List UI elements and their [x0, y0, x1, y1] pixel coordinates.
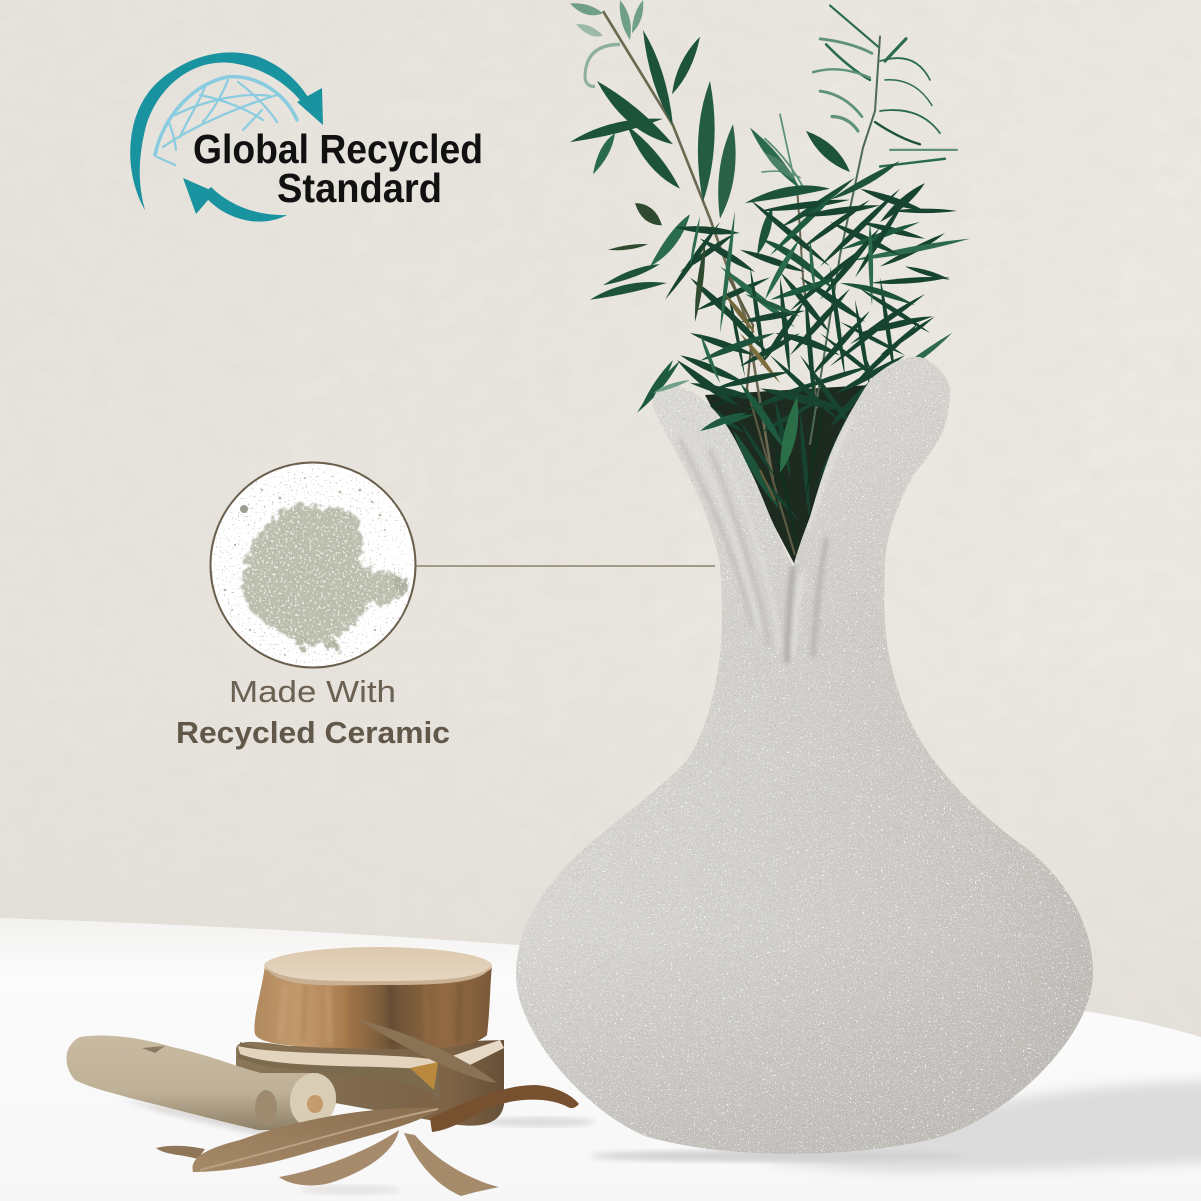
- connector line: [416, 565, 715, 567]
- big leaf: [193, 1108, 440, 1172]
- upper leaf: [358, 1020, 497, 1083]
- logo text: [193, 126, 483, 211]
- right stalk: [762, 6, 957, 444]
- left stalk: [570, 0, 795, 555]
- dried leaves and twig: [156, 1020, 579, 1196]
- dark vase interior: [705, 385, 870, 567]
- table shadows: [120, 1080, 1201, 1195]
- lower leaf: [279, 1130, 399, 1185]
- dense foliage: [637, 128, 970, 555]
- caption text: Recycled Ceramic: [176, 715, 450, 750]
- outer teal arrow: [130, 52, 323, 210]
- front leaves: [643, 360, 798, 510]
- vase: [510, 350, 1100, 1160]
- lower wood slice: [236, 1040, 504, 1126]
- recycled ceramic powder circle: [210, 462, 416, 668]
- powder pile: [210, 462, 416, 668]
- caption text: Made With: [229, 674, 396, 709]
- vase texture and shading: [510, 350, 1100, 1160]
- globe icon: [155, 77, 297, 165]
- log branch: [66, 1035, 340, 1131]
- recycled standard logo: [130, 52, 483, 222]
- lower teal arrow: [183, 178, 287, 222]
- twig: [430, 1085, 579, 1132]
- table surface: [0, 918, 1201, 1201]
- logo text: Global Recycled: [193, 126, 483, 172]
- plant: [570, 0, 970, 555]
- neck ridges: [680, 417, 853, 660]
- caption text: [176, 674, 450, 750]
- logo text: Standard: [277, 165, 442, 211]
- vase body: [516, 357, 1093, 1154]
- upper wood slice: [254, 947, 492, 1049]
- left small leaf: [156, 1146, 205, 1159]
- right leaf: [404, 1133, 499, 1196]
- wood slices: [66, 947, 504, 1131]
